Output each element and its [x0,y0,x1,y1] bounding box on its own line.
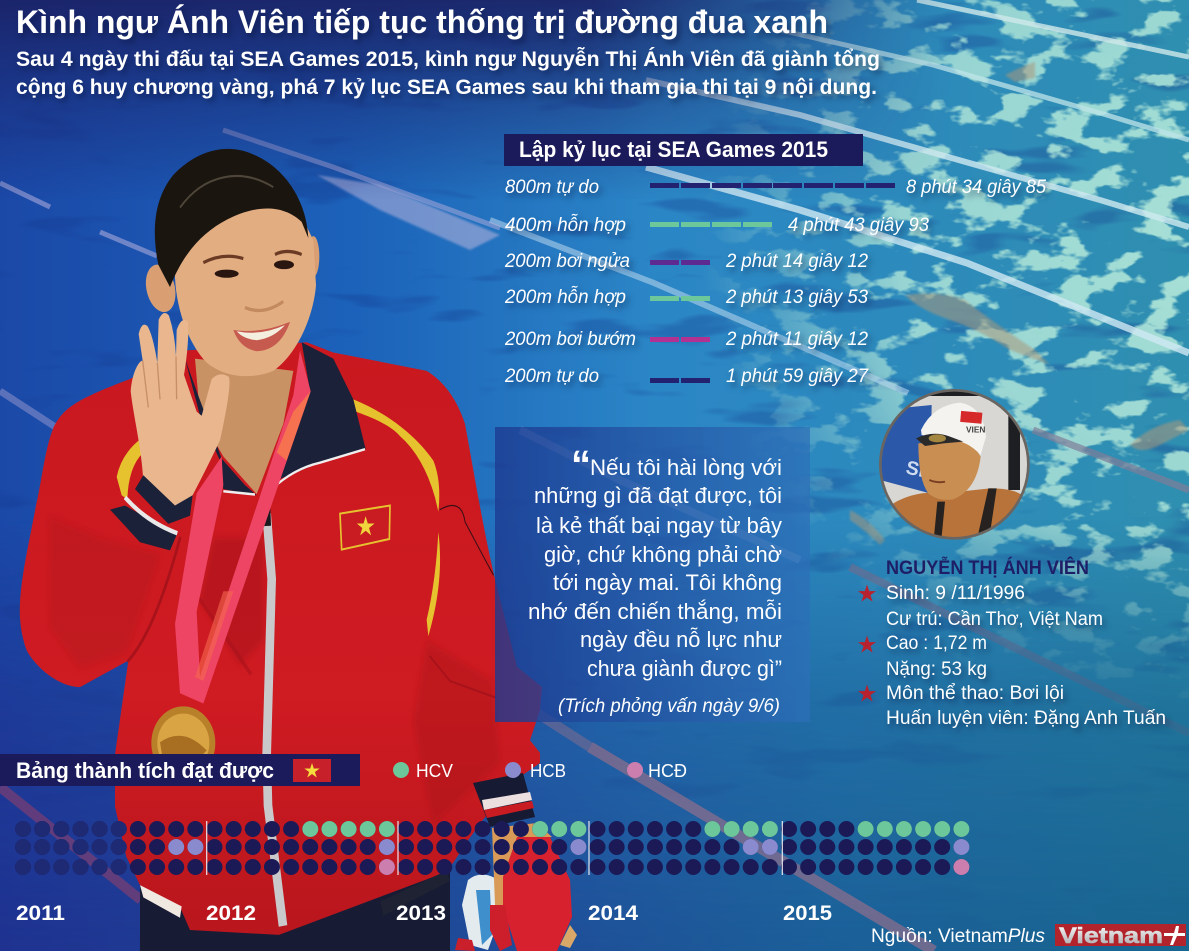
bio lines: Sinh: 9 /11/1996 [886,583,1025,604]
record bars [650,183,895,383]
quote text: giờ, chứ không phải chờ [544,542,782,567]
dot matrix chart of medals 2011-2015 [23,821,970,875]
intro text [16,47,880,99]
zipper [267,514,283,926]
logo: Vietnam+: Vietnam [1059,923,1163,948]
quote source: (Trích phỏng vấn ngày 9/6) [558,696,780,717]
title: Kình ngư Ánh Viên tiếp tục thống trị đường đua xanh [16,4,828,40]
record labels and times: 200m bơi ngửa [504,251,630,272]
sleeve and body folds [50,518,500,824]
legend: HCĐ [648,761,687,781]
bronze medal dots [379,859,969,875]
panel: athlete bio [858,557,1166,729]
mascot toy [455,823,577,951]
hem stripes [140,885,182,918]
record labels and times: 2 phút 11 giây 12 [725,329,868,350]
bio stars [858,584,876,702]
right cuff [473,773,535,827]
quote text [528,455,782,681]
year labels: 2012 [206,902,256,925]
year labels: 2013 [396,902,446,925]
medal [151,706,215,780]
record labels and times: 200m hỗn hợp [504,287,626,308]
year labels: 2014 [588,902,638,925]
lanyard [175,350,311,703]
swimmers [850,62,1189,545]
icon: Vietnam flag [293,759,331,782]
panel: quote [495,427,810,722]
wrist cuff [135,475,193,524]
record labels and times [504,177,1046,387]
record labels and times: 8 phút 34 giây 85 [906,177,1046,198]
legend [393,761,687,781]
quote text: Nếu tôi hài lòng với [590,455,782,480]
legend: HCV [416,761,453,781]
portrait photo in circle: Sin [904,458,938,484]
year labels: 2015 [783,902,832,925]
source credit: Nguồn: VietnamPlus [871,926,1045,947]
quote text: là kẻ thất bại ngay từ bây [536,513,782,538]
intro text: Sau 4 ngày thi đấu tại SEA Games 2015, kình ngư Nguyễn Thị Ánh Viên đã giành tổng [16,47,880,71]
record labels and times: 4 phút 43 giây 93 [788,215,929,236]
record labels and times: 1 phút 59 giây 27 [726,366,869,387]
athlete name: NGUYỄN THỊ ÁNH VIÊN [886,557,1089,579]
quote text: tới ngày mai. Tôi không [553,570,782,595]
neck [195,359,293,494]
bio lines: Nặng: 53 kg [886,659,987,680]
bio lines [886,583,1166,729]
facial features [203,256,243,263]
year labels: 2011 [16,902,65,925]
jacket [20,342,542,935]
record labels and times: 200m tự do [504,366,599,387]
heading: achievements table [0,754,360,786]
waving hand [131,313,229,512]
record labels and times: 2 phút 13 giây 53 [725,287,868,308]
legend: HCB [530,761,566,781]
year separators [207,821,782,875]
gold medal dots [302,821,969,837]
records heading: Lập kỷ lục tại SEA Games 2015 [519,137,828,162]
quote text: ngày đều nỗ lực như [580,627,782,652]
bio lines: Môn thể thao: Bơi lội [886,683,1064,704]
intro text: cộng 6 huy chương vàng, phá 7 kỷ lục SEA Games sau khi tham gia thi tại 9 nội dung. [16,76,877,99]
portrait photo in circle [880,390,1030,540]
record labels and times: 400m hỗn hợp [505,215,626,236]
bio lines: Cao : 1,72 m [886,633,987,654]
chest flag badge [340,506,390,550]
record labels and times: 800m tự do [505,177,599,198]
record labels and times: 2 phút 14 giây 12 [725,251,868,272]
record labels and times: 200m bơi bướm [504,329,636,350]
silver medal dots [168,839,969,855]
heading: achievements table: Bảng thành tích đạt được [16,758,274,783]
hair [155,149,308,287]
quote text: chưa giành được gì” [587,656,782,681]
year labels [16,902,832,925]
face and ears [141,259,181,317]
quote text: nhớ đến chiến thắng, mỗi [528,599,782,624]
collar [275,342,366,481]
bio lines: Huấn luyện viên: Đặng Anh Tuấn [886,708,1166,729]
quote text: những gì đã đạt được, tôi [534,483,782,508]
trousers [140,861,450,951]
panel: SEA Games 2015 records [504,134,1046,387]
athlete photo: Nguyễn Thị Ánh Viên waving [20,149,577,951]
bio lines: Cư trú: Cần Thơ, Việt Nam [886,609,1103,630]
quotation mark: “ [571,443,591,487]
logo: Vietnam+ [1055,923,1186,948]
yellow shoulder stripes [353,399,439,512]
portrait photo in circle: VIEN [966,425,985,435]
